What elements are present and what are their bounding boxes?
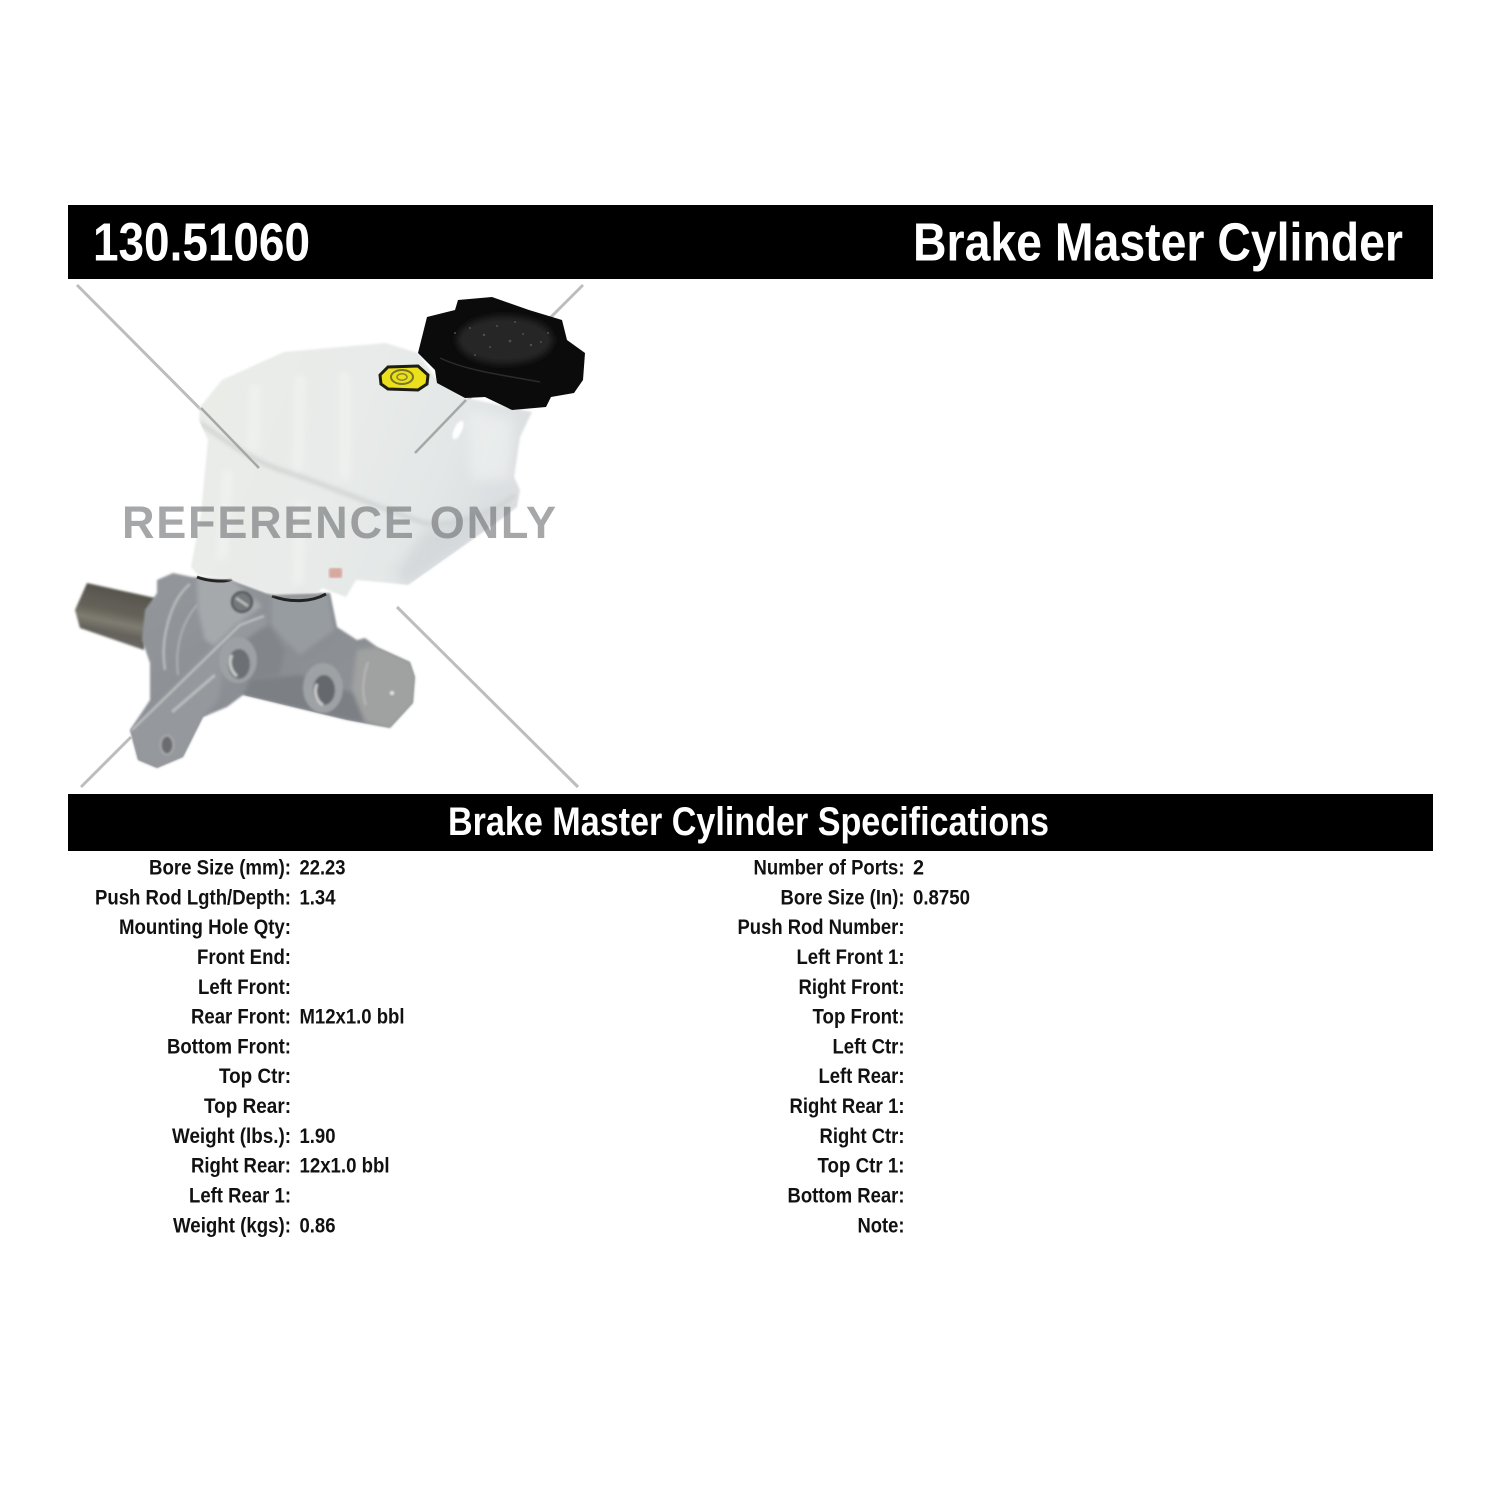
right specifications column: Left Front 1: xyxy=(796,946,904,969)
right specifications column: Right Front: xyxy=(798,976,904,999)
icon: yellow warning label xyxy=(380,366,428,390)
right specifications column: Note: xyxy=(858,1214,904,1238)
left specifications column: Left Front: xyxy=(198,976,291,999)
left specifications column: Top Ctr: xyxy=(219,1065,291,1088)
crossed reference lines xyxy=(77,285,583,787)
ribs xyxy=(222,372,345,585)
mounting arm edge xyxy=(132,616,264,730)
specifications title: Brake Master Cylinder Specifications xyxy=(448,800,1049,844)
left specifications column: Push Rod Lgth/Depth: xyxy=(95,886,291,910)
left specifications column: M12x1.0 bbl xyxy=(300,1006,404,1028)
header bar xyxy=(68,205,1433,279)
right specifications column: Right Rear 1: xyxy=(790,1095,904,1118)
icon: black reservoir cap xyxy=(418,297,585,410)
left specifications column: Weight (lbs.): xyxy=(172,1125,291,1148)
icon: fluid reservoir xyxy=(191,343,532,597)
lid seam xyxy=(200,423,515,524)
right specifications column: 0.8750 xyxy=(913,886,970,910)
product title: Brake Master Cylinder xyxy=(913,212,1403,272)
left specifications column: 0.86 xyxy=(300,1214,336,1238)
right specifications column: Left Ctr: xyxy=(832,1036,904,1058)
right specifications column: Number of Ports: xyxy=(754,856,904,880)
left specifications column: Top Rear: xyxy=(204,1095,291,1118)
icon: mounting hole xyxy=(160,736,174,754)
right specifications column: Top Ctr 1: xyxy=(818,1154,904,1178)
left specifications column: 1.34 xyxy=(300,886,336,910)
right specifications column: Top Front: xyxy=(812,1006,904,1028)
left specifications column: Weight (kgs): xyxy=(173,1214,291,1238)
left specifications column: Left Rear 1: xyxy=(189,1184,291,1208)
flange ribs xyxy=(164,584,190,670)
left specifications column: Mounting Hole Qty: xyxy=(119,916,291,939)
right specifications column: Right Ctr: xyxy=(820,1125,904,1148)
right specifications column: 2 xyxy=(913,856,924,880)
left specifications column: Front End: xyxy=(197,946,291,969)
part number: 130.51060 xyxy=(93,212,310,272)
seals xyxy=(197,577,232,581)
icon: push rod xyxy=(75,583,155,650)
left specifications column: 1.90 xyxy=(300,1125,336,1148)
icon: aluminium body xyxy=(130,573,415,768)
right specifications column: Left Rear: xyxy=(818,1065,904,1088)
right side highlight xyxy=(474,418,510,477)
right specifications column: Bore Size (In): xyxy=(780,886,904,910)
specifications heading bar xyxy=(68,794,1433,851)
left specifications column xyxy=(95,856,404,1238)
right specifications column xyxy=(738,856,970,1238)
product photo: brake master cylinder with reference lines xyxy=(75,285,585,787)
right specifications column: Bottom Rear: xyxy=(788,1184,904,1208)
cylinder tower shading xyxy=(197,578,262,650)
left specifications column: Bore Size (mm): xyxy=(149,856,291,880)
icon: screw xyxy=(232,592,252,612)
left specifications column: Rear Front: xyxy=(191,1006,291,1028)
left specifications column: Right Rear: xyxy=(191,1154,291,1178)
icon: brake line ports xyxy=(219,637,257,683)
lower shading xyxy=(400,518,502,584)
left specifications column: Bottom Front: xyxy=(167,1036,291,1058)
watermark: REFERENCE ONLY xyxy=(122,497,556,548)
left specifications column: 22.23 xyxy=(300,856,346,880)
right specifications column: Push Rod Number: xyxy=(738,916,904,939)
reference lines seen through reservoir xyxy=(201,400,466,468)
left specifications column: 12x1.0 bbl xyxy=(300,1154,390,1178)
